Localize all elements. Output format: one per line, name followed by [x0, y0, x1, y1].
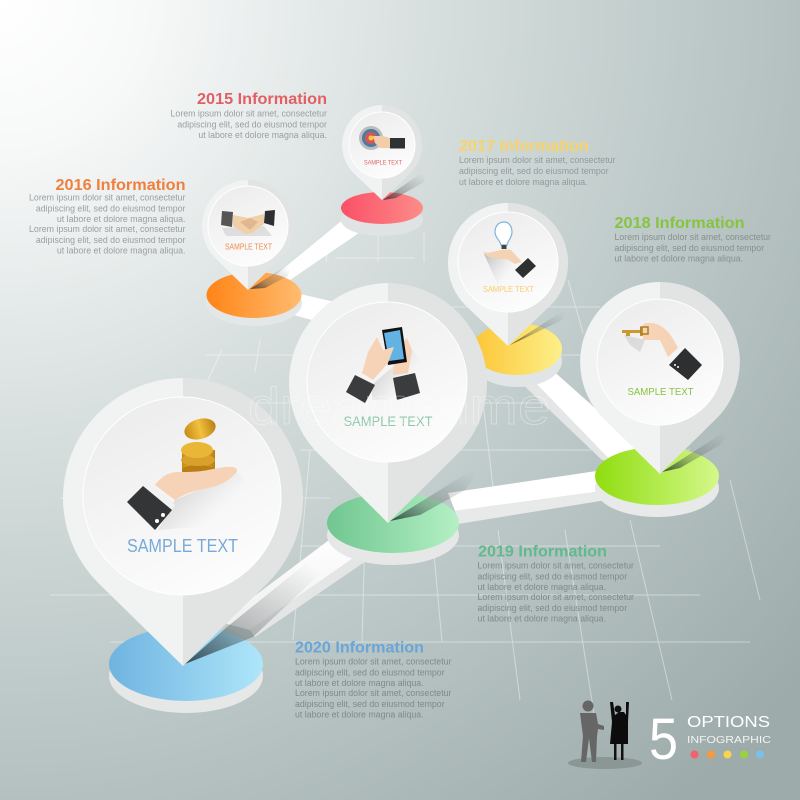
connector: 2016 to 2019 [290, 294, 335, 320]
body: 2015 [171, 108, 327, 140]
body: 2019: ut labore et dolore magna aliqua. [478, 582, 606, 592]
icon: target and hand [359, 126, 405, 150]
body: 2020: adipiscing elit, sed do eiusmod tempor [295, 668, 445, 678]
body: 2016 [29, 192, 186, 256]
disk: 2016 [206, 272, 302, 326]
heading: 2019 information: 2019 Information [478, 544, 607, 560]
body: 2017: Lorem ipsum dolor sit amet, consectetur [459, 155, 616, 165]
body: 2016: ut labore et dolore magna aliqua. [57, 246, 186, 256]
body: 2020: ut labore et dolore magna aliqua. [295, 710, 424, 720]
icon: hand holding gold coins [127, 415, 258, 530]
text block: 2018 information [614, 215, 771, 264]
body: 2016: Lorem ipsum dolor sit amet, consectetur [29, 192, 186, 202]
pin: 2018 [580, 282, 740, 474]
body: 2019: Lorem ipsum dolor sit amet, consectetur [478, 592, 634, 602]
body: 2020: ut labore et dolore magna aliqua. [295, 678, 424, 688]
label: sample text 2015: SAMPLE TEXT [364, 160, 402, 166]
icon: hands holding smartphone [346, 327, 428, 403]
disk: 2017 [472, 323, 562, 387]
body: 2018: adipiscing elit, sed do eiusmod tempor [614, 243, 764, 253]
watermark: dreamstime [248, 378, 550, 436]
icon: key in hand [622, 323, 702, 380]
body: 2015: adipiscing elit, sed do eiusmod tempor [177, 120, 327, 130]
connector: 2015 to 2016 [272, 218, 372, 280]
heading: 2016 information: 2016 Information [56, 177, 186, 194]
label: sample text 2016: SAMPLE TEXT [225, 242, 272, 252]
text block: 2020 information [295, 640, 452, 720]
label: sample text 2018: SAMPLE TEXT [628, 386, 694, 398]
body: 2016: ut labore et dolore magna aliqua. [57, 214, 186, 224]
connector: 2017 to 2018 [518, 368, 640, 462]
label: infographic: INFOGRAPHIC [687, 734, 771, 746]
icon: light bulb on hand [483, 222, 536, 285]
body: 2017: ut labore et dolore magna aliqua. [459, 177, 588, 187]
disk: 2020 [109, 627, 263, 713]
text block: 2016 information [29, 177, 186, 256]
body: 2018: Lorem ipsum dolor sit amet, consectetur [614, 232, 771, 242]
disk: 2019 [327, 493, 459, 565]
heading: 2015 information: 2015 Information [197, 91, 327, 108]
body: 2020: adipiscing elit, sed do eiusmod tempor [295, 699, 445, 709]
label: sample text 2017: SAMPLE TEXT [483, 284, 534, 294]
pin: 2019 [289, 283, 487, 523]
disk: 2018 [595, 447, 719, 517]
label: options: OPTIONS [687, 714, 770, 731]
connector: 2018 to 2019 [448, 469, 625, 524]
logo: 5 options infographic [649, 707, 771, 772]
body: 2016: Lorem ipsum dolor sit amet, consectetur [29, 224, 186, 234]
text block: 2019 information [478, 544, 634, 624]
body: 2020 [295, 656, 452, 720]
body: 2020: Lorem ipsum dolor sit amet, consectetur [295, 656, 452, 666]
perspective floor grid [50, 232, 760, 720]
text block: 2015 information [171, 91, 327, 140]
body: 2017 [459, 155, 616, 187]
body: 2019 [478, 560, 634, 624]
heading: 2017 information: 2017 Information [459, 138, 589, 155]
pin: 2016 [202, 180, 294, 290]
heading: 2018 information: 2018 Information [614, 215, 744, 232]
disk: 2015 [341, 192, 423, 236]
text block: 2017 information [459, 138, 616, 187]
body: 2017: adipiscing elit, sed do eiusmod tempor [459, 166, 609, 176]
body: 2015: ut labore et dolore magna aliqua. [198, 130, 327, 140]
body: 2019: Lorem ipsum dolor sit amet, consectetur [478, 560, 634, 570]
label: sample text 2020: SAMPLE TEXT [127, 536, 238, 556]
pin: 2015 [342, 105, 428, 200]
body: 2016: adipiscing elit, sed do eiusmod tempor [36, 204, 186, 214]
heading: 2020 information: 2020 Information [295, 640, 424, 656]
body: 2019: ut labore et dolore magna aliqua. [478, 614, 606, 624]
pin: 2017 [448, 203, 572, 346]
body: 2019: adipiscing elit, sed do eiusmod tempor [478, 603, 627, 613]
body: 2016: adipiscing elit, sed do eiusmod tempor [36, 235, 186, 245]
pin: 2020 [63, 378, 340, 666]
body: 2019: adipiscing elit, sed do eiusmod tempor [478, 572, 627, 582]
number 5: 5 [649, 707, 678, 772]
body: 2015: Lorem ipsum dolor sit amet, consectetur [171, 108, 327, 118]
icon: business people silhouettes [568, 700, 642, 769]
body: 2018 [614, 232, 771, 264]
body: 2020: Lorem ipsum dolor sit amet, consectetur [295, 688, 452, 698]
label: sample text 2019: SAMPLE TEXT [344, 413, 433, 429]
colour dots [690, 750, 764, 758]
connector: 2019 to 2020 [220, 537, 366, 637]
icon: handshake [221, 210, 275, 236]
body: 2018: ut labore et dolore magna aliqua. [614, 254, 743, 264]
